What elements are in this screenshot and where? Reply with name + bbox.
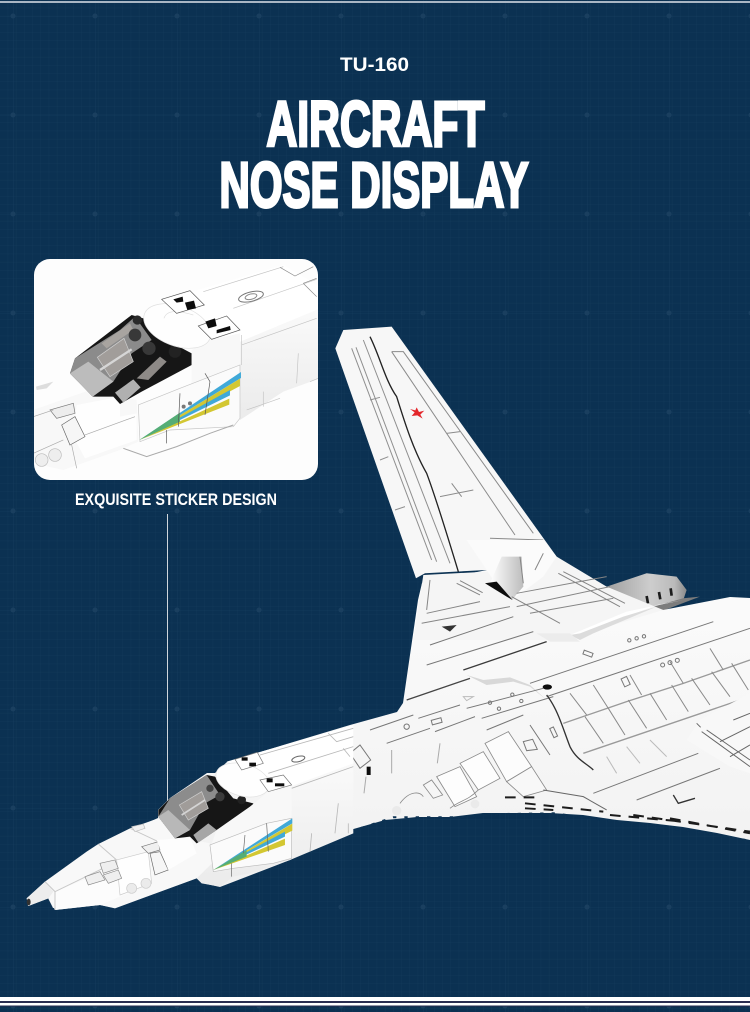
wing root and raised fold — [413, 540, 663, 640]
title: Aircraft Nose Display: NOSE DISPLAY — [220, 149, 528, 221]
side panel with stripe sticker — [210, 818, 292, 877]
inset: nose section — [33, 382, 138, 470]
inset: black and white decals — [162, 291, 240, 339]
rear elevator — [687, 693, 750, 773]
notched lower edge — [350, 813, 750, 841]
title: Aircraft Nose Display — [220, 88, 528, 221]
leader line — [166, 514, 168, 816]
canopy dome and decals — [210, 752, 292, 848]
aircraft skin silhouette — [27, 557, 750, 908]
bottom double rule — [0, 997, 750, 1006]
title: Aircraft Nose Display: AIRCRAFT — [266, 88, 484, 160]
rear engine nacelle — [607, 573, 700, 611]
forward fuselage — [197, 725, 353, 887]
panel: sticker close-up inset — [33, 259, 320, 480]
underside landing gear blocks — [392, 732, 547, 815]
icon: red star — [410, 407, 424, 419]
inset caption: EXQUISITE STICKER DESIGN — [75, 491, 277, 509]
tail fin — [335, 327, 557, 578]
aircraft model — [27, 327, 750, 910]
underside gear bays — [505, 790, 750, 833]
cockpit — [158, 775, 253, 843]
wing and fuselage panel lines — [350, 617, 750, 800]
nose section — [27, 818, 213, 910]
subtitle: TU-160: TU-160 — [340, 55, 409, 76]
inset: cockpit — [70, 315, 192, 404]
inset: canopy dome — [138, 295, 240, 383]
inset: side panel with stripe sticker — [123, 365, 241, 457]
inset: fuselage body — [203, 266, 318, 420]
wing root fairing — [467, 600, 683, 700]
